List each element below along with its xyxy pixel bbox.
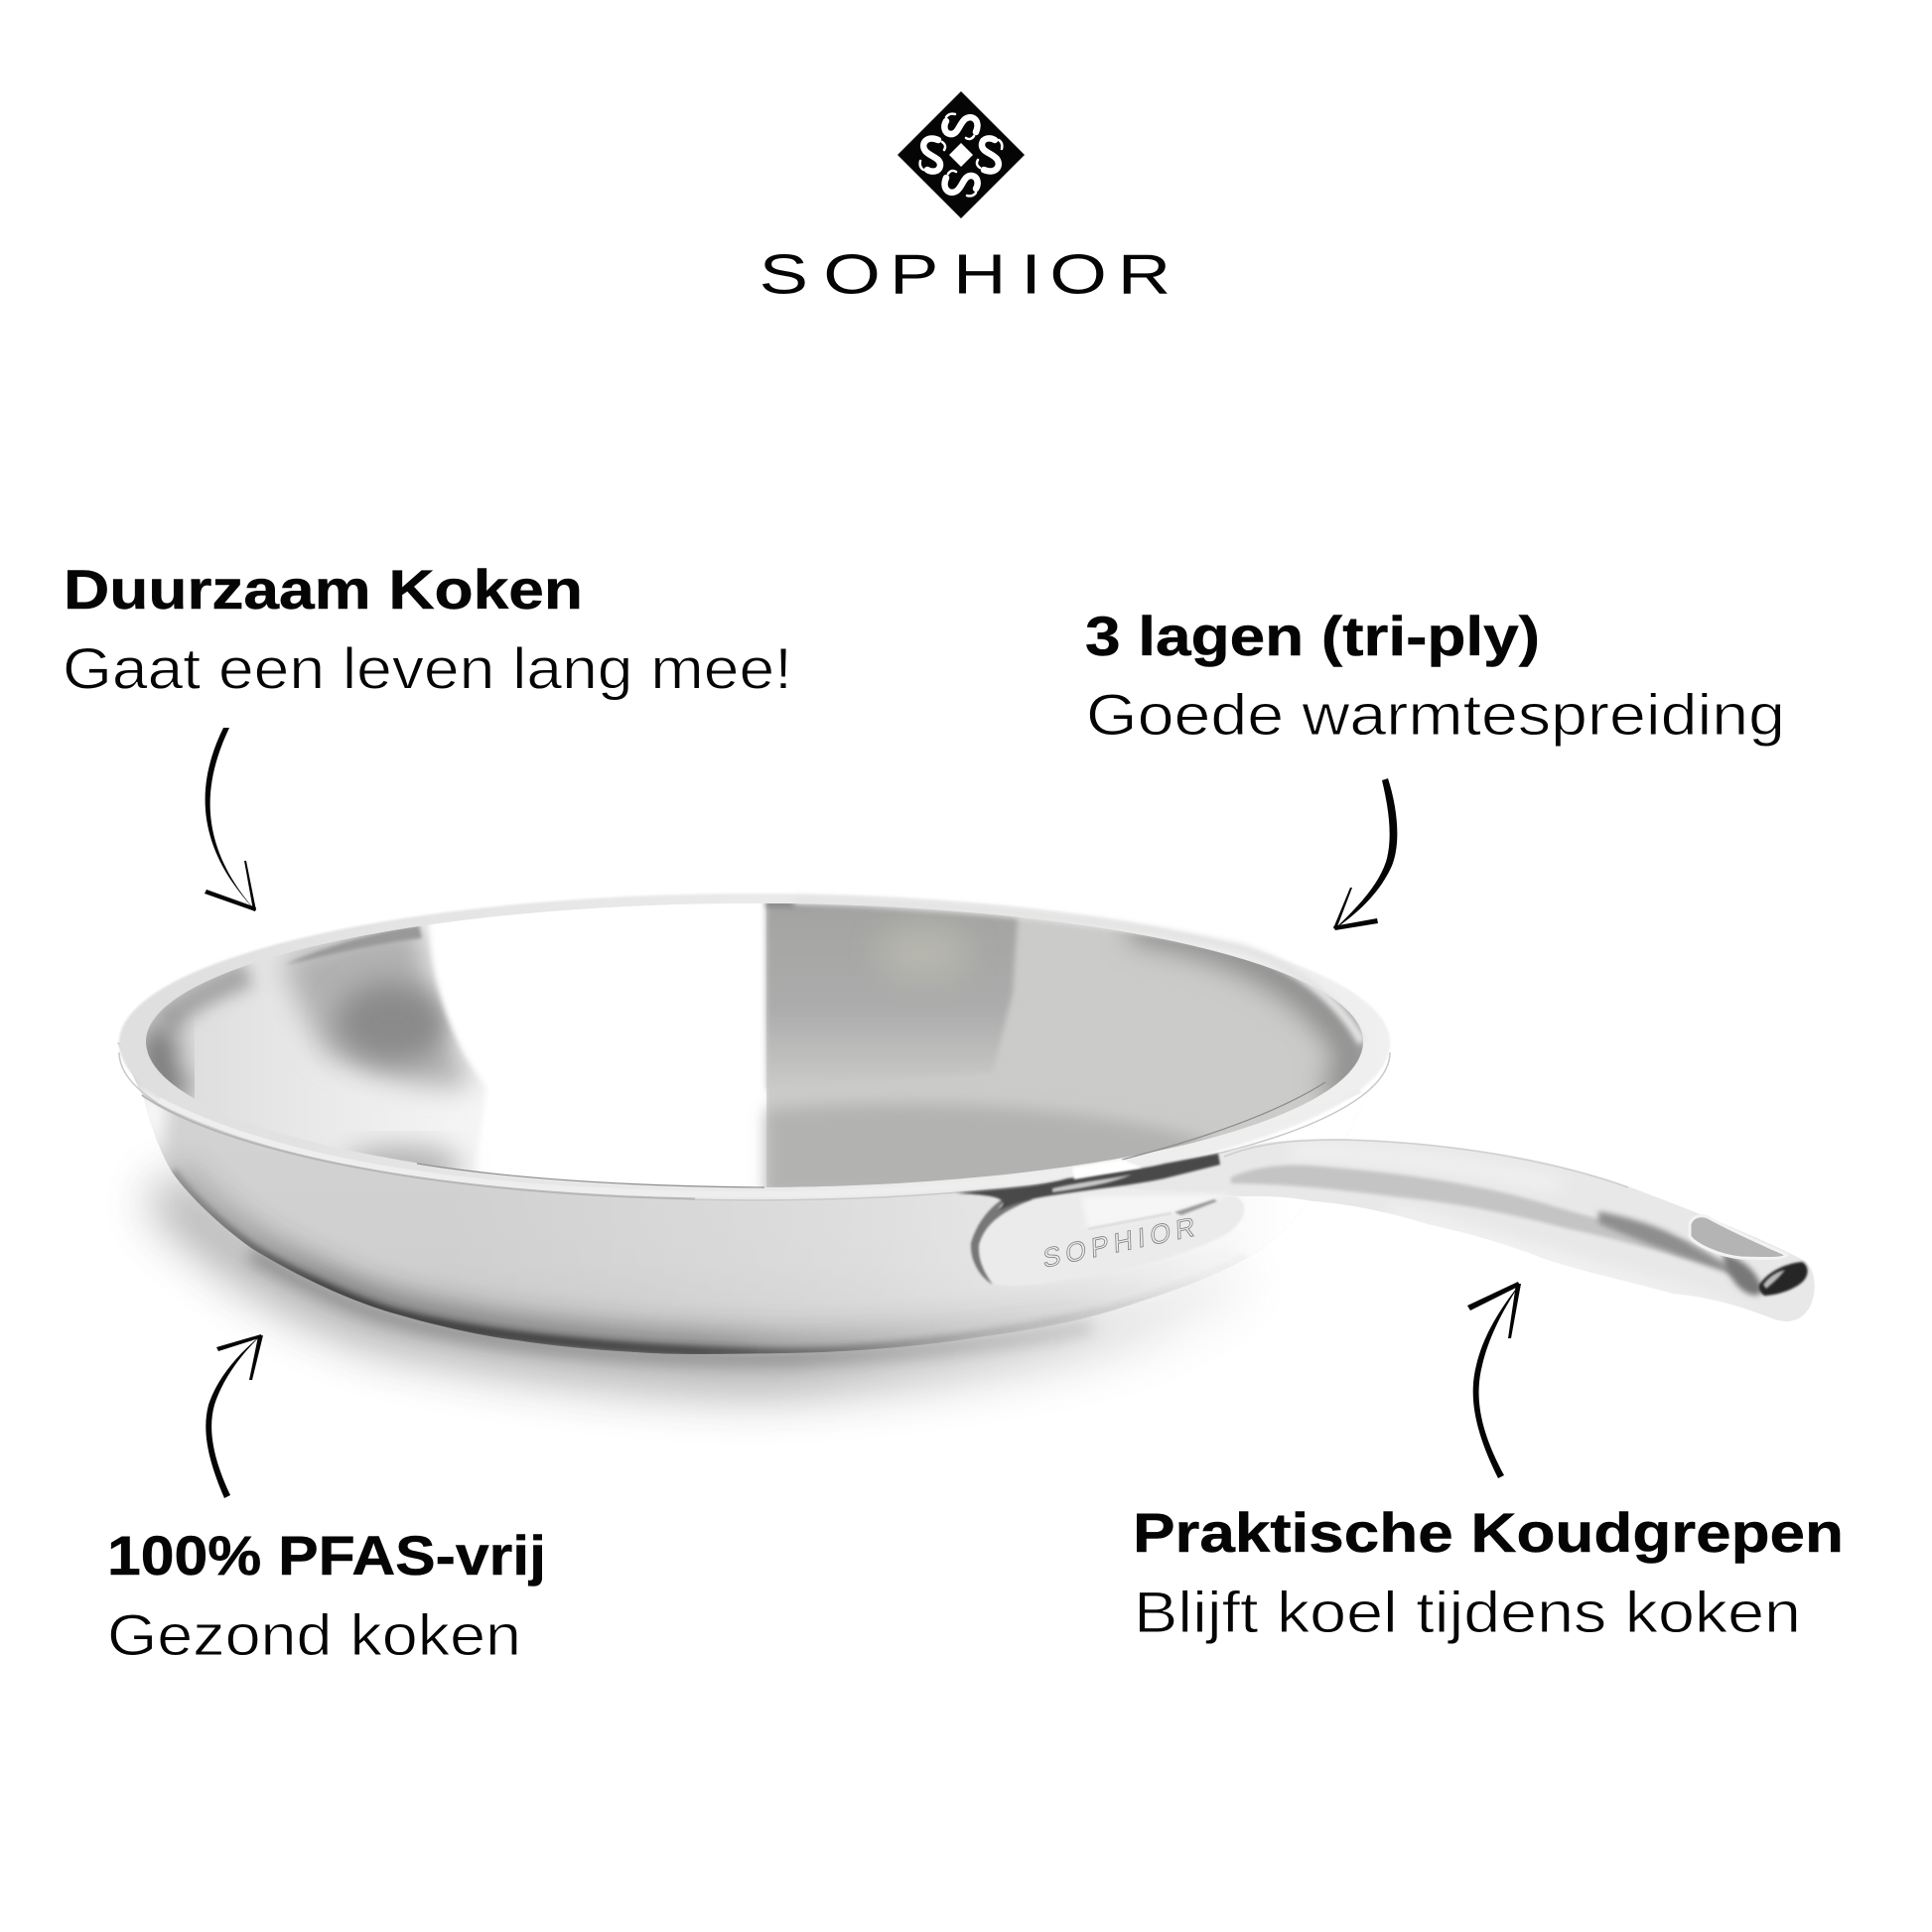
pan body (117, 1033, 1400, 1370)
chrome before tip (1723, 1253, 1763, 1296)
lower left dark patch (343, 1147, 462, 1186)
plate fold (1082, 1194, 1231, 1229)
lower highlight (1390, 1206, 1767, 1315)
arrow: to rim, right (1333, 778, 1397, 930)
heading: Praktische Koudgrepen (1133, 1501, 1844, 1564)
handle mounting plate (956, 1154, 1244, 1286)
handle (1092, 1139, 1815, 1321)
handle hanging hole (1690, 1216, 1787, 1259)
icon: diamond emblem (897, 91, 1025, 218)
floor (766, 1104, 1211, 1196)
right wall dark band (1132, 923, 1353, 1097)
chrome streak at handle joint (956, 1154, 1220, 1211)
heading: 100% PFAS-vrij (107, 1524, 546, 1587)
subtext: Goede warmtespreiding (1086, 683, 1785, 748)
pan interior (146, 903, 1363, 1187)
arrow: to rim, left (205, 728, 256, 911)
subtext: Gezond koken (107, 1603, 521, 1668)
heading: 3 lagen (tri-ply) (1085, 605, 1540, 667)
callout: Praktische Koudgrepen (1133, 1501, 1844, 1645)
left dark reflection (283, 923, 475, 1086)
chrome edge (971, 1191, 1033, 1285)
callout: Duurzaam Koken (63, 558, 792, 701)
subtext: Blijft koel tijdens koken (1134, 1581, 1801, 1645)
callout: 3 lagen (1085, 605, 1785, 748)
right dark upper reflection (766, 889, 1020, 1090)
pan shadow (164, 1186, 1241, 1370)
central dark band (1230, 1164, 1725, 1266)
pan rim (119, 894, 1390, 1200)
wordmark: SOPHIOR (759, 243, 1171, 306)
upper highlight (1291, 1144, 1569, 1191)
heading: Duurzaam Koken (64, 558, 583, 621)
white reflection (427, 904, 767, 1173)
frying pan (117, 884, 1815, 1370)
callout: 100% PFAS-vrij (107, 1524, 546, 1668)
rim front edge lines (142, 1082, 1360, 1199)
embossed brand text: SOPHIOR (1042, 1210, 1197, 1274)
arrow: to pan base (206, 1334, 263, 1498)
left edge dark band (164, 973, 248, 1023)
handle end cap (1759, 1262, 1808, 1296)
logo: Sophior (759, 91, 1171, 306)
arrow: to handle (1467, 1282, 1521, 1478)
subtext: Gaat een leven lang mee! (63, 637, 792, 701)
